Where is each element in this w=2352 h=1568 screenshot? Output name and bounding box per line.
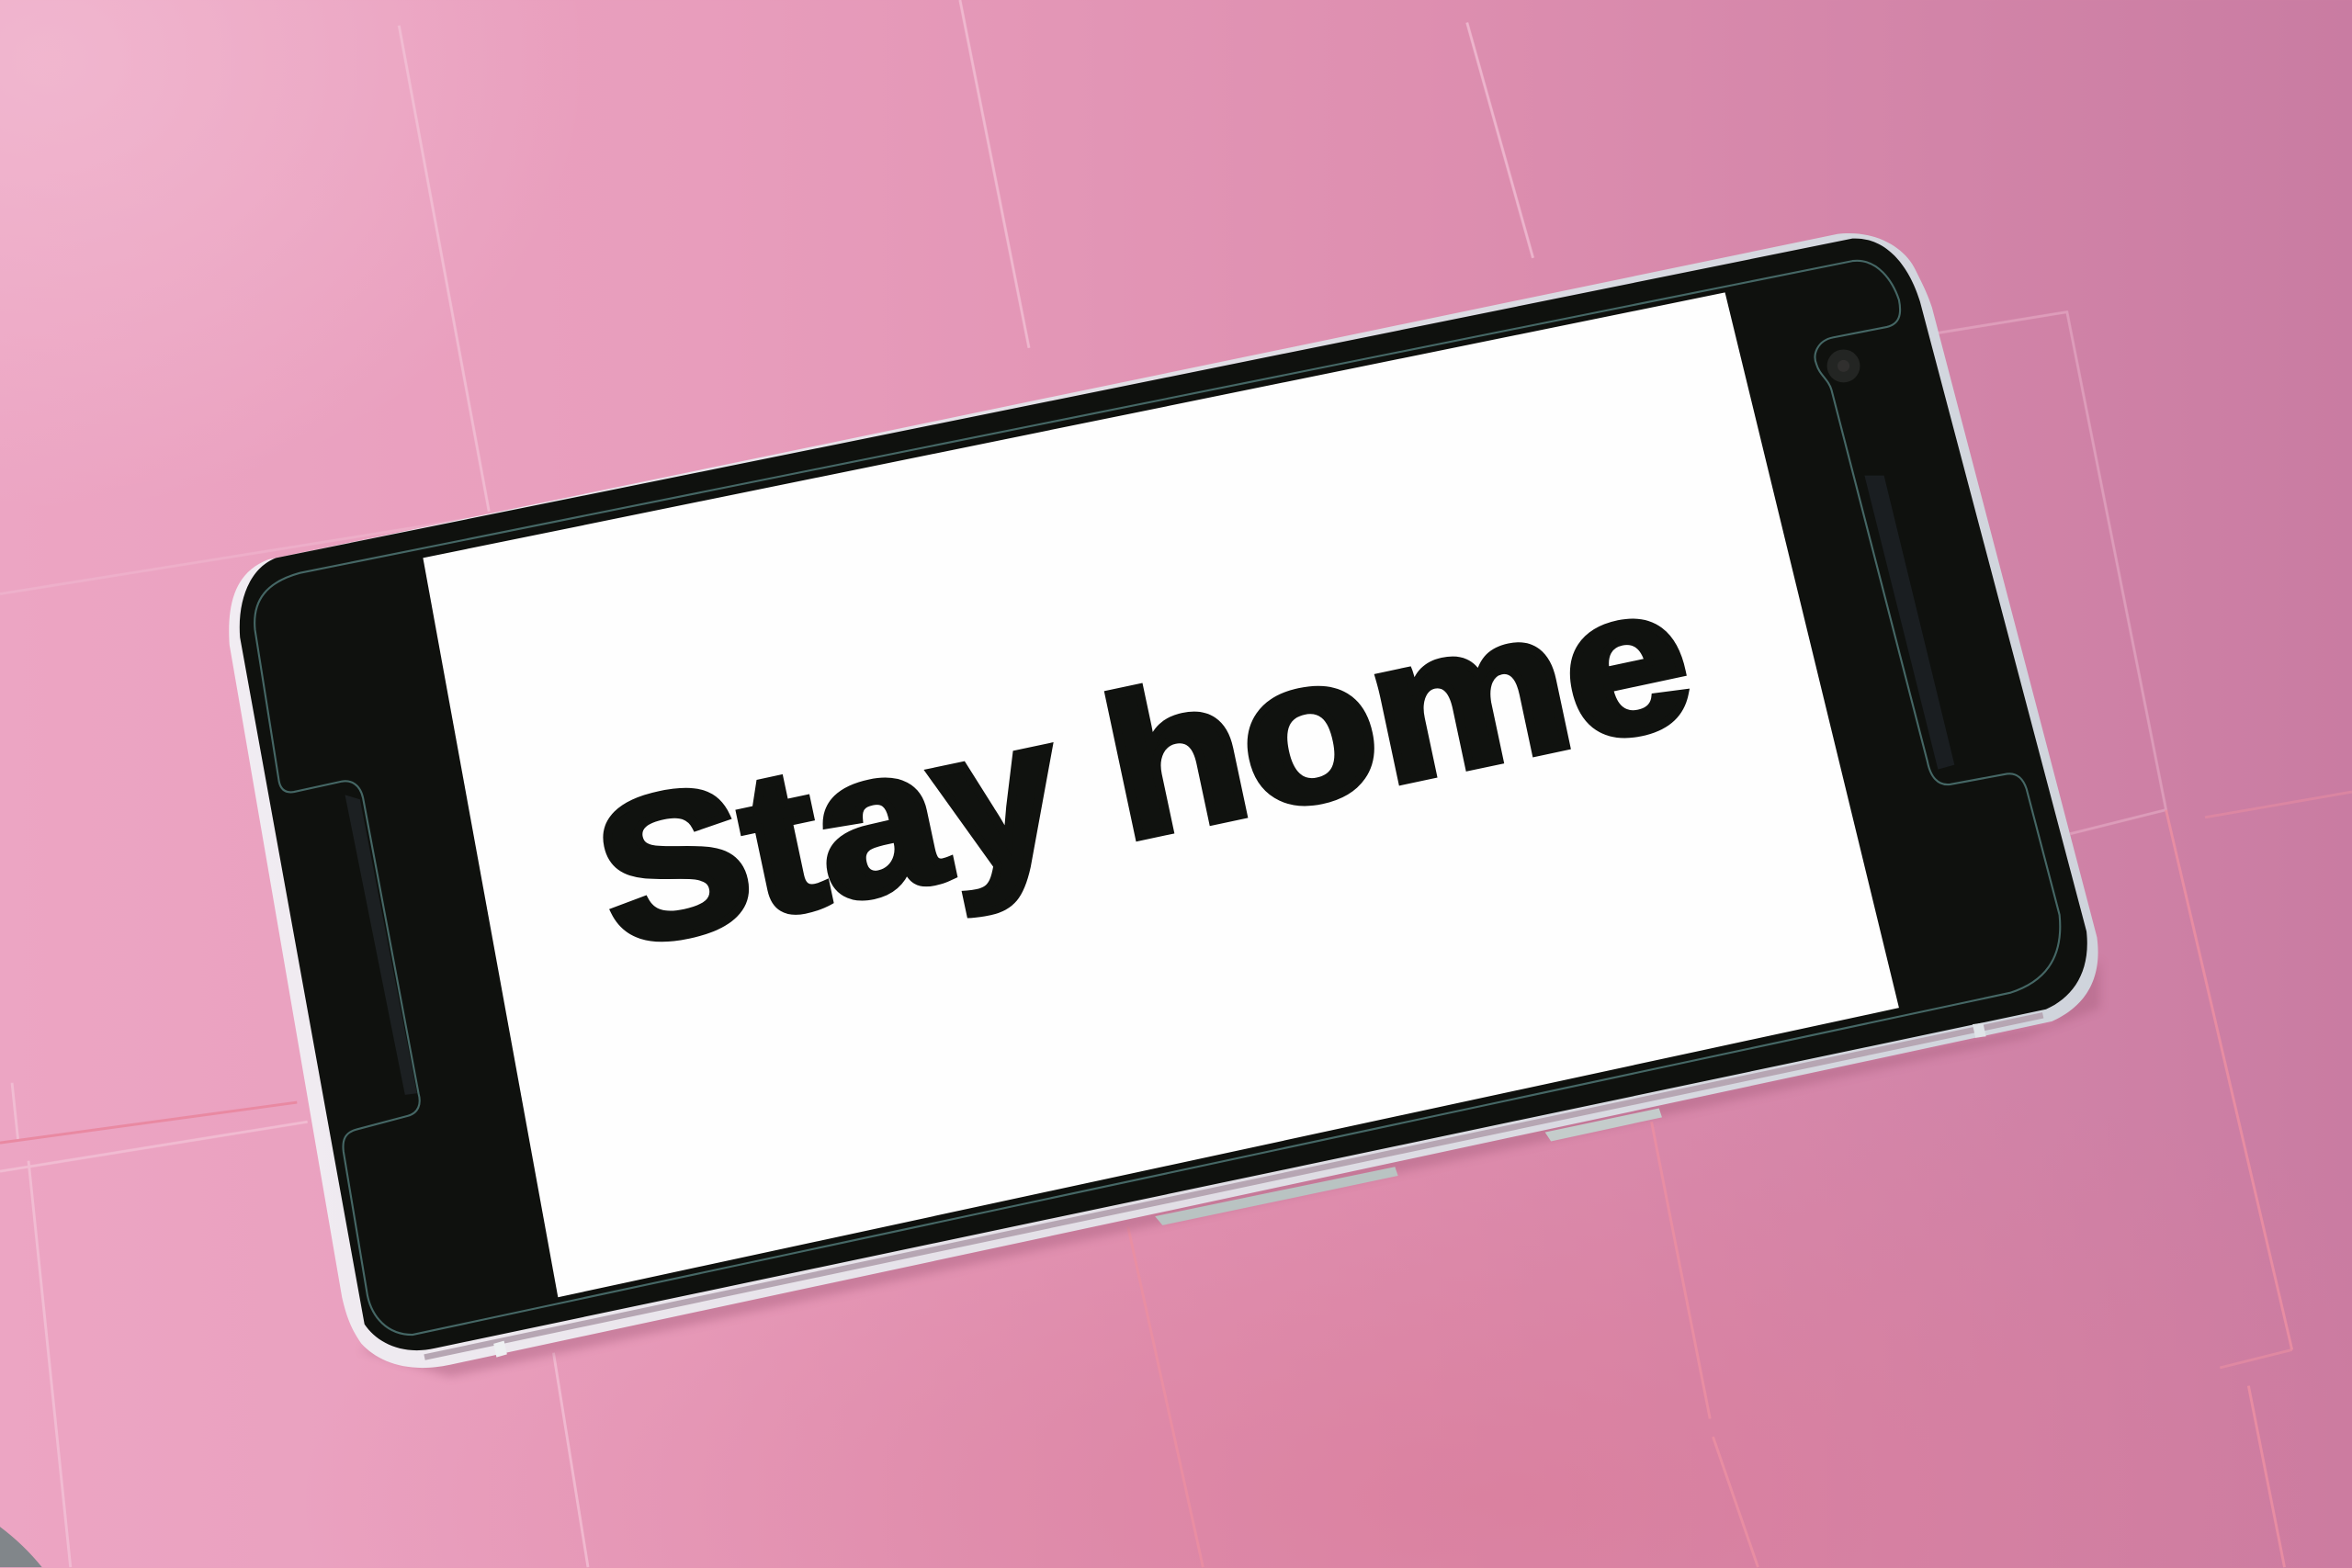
antenna band left xyxy=(493,1341,507,1358)
gray band in lower frame xyxy=(424,1015,2043,1358)
right speaker grille xyxy=(1864,476,1954,770)
screen protector outline xyxy=(254,261,2060,1335)
left speaker grille xyxy=(345,795,417,1095)
side button long xyxy=(1155,1167,1398,1225)
side button short xyxy=(1545,1109,1662,1141)
silver phone frame xyxy=(229,233,2098,1368)
phone shadow xyxy=(360,960,2100,1377)
antenna band right xyxy=(1973,1023,1986,1038)
surface panel creases, lower right xyxy=(0,792,2352,1567)
front camera xyxy=(1827,349,1860,382)
black phone face xyxy=(240,239,2087,1350)
white screen xyxy=(423,292,1899,1297)
phone xyxy=(229,233,2100,1377)
dark object in bottom left corner xyxy=(0,1527,42,1567)
screen text: Stay home: Stay home xyxy=(579,539,1708,990)
